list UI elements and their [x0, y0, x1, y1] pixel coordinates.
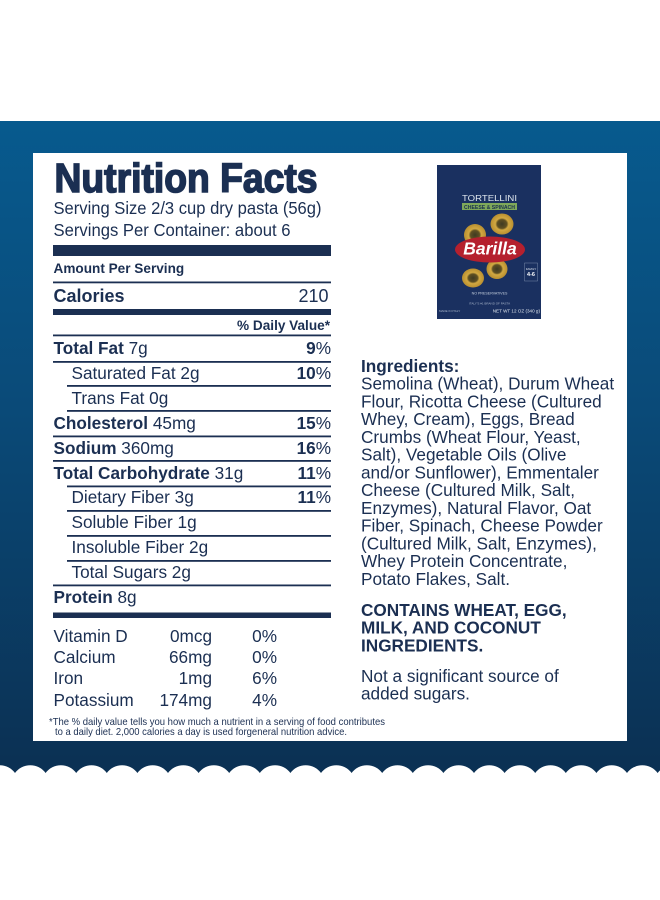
footnote: [49, 717, 385, 738]
ingredients block: Fiber, Spinach, Cheese Powder: [361, 516, 603, 536]
vitamins and minerals: [54, 626, 277, 710]
panel: white card: [33, 153, 627, 741]
nutrient rows: Soluble Fiber 1g: [72, 512, 197, 532]
package name: TORTELLINI: [462, 194, 517, 203]
added sugars note: Not a significant source of: [361, 666, 559, 686]
product package: [437, 165, 541, 319]
vitamins and minerals: 6%: [252, 668, 277, 688]
nutrient rows: Total Fat 7g: [54, 338, 148, 358]
vitamins and minerals: 0mcg: [170, 626, 212, 646]
vitamins and minerals: 4%: [252, 690, 277, 710]
nutrient rows: 11%: [298, 463, 331, 483]
vitamins and minerals: Vitamin D: [54, 626, 128, 646]
nutrient rows: 16%: [297, 438, 331, 458]
vitamins and minerals: Iron: [54, 668, 83, 688]
added sugars note: [361, 666, 559, 704]
blue background band with scalloped edge: [0, 121, 660, 773]
Barilla logo: Barilla: [463, 238, 517, 258]
allergen statement: INGREDIENTS.: [361, 636, 483, 656]
ingredients block: and/or Sunflower), Emmentaler: [361, 462, 599, 482]
nutrient rows: Trans Fat 0g: [72, 388, 168, 408]
ingredients block: [361, 356, 614, 589]
nutrient rows: 11%: [298, 487, 331, 507]
nutrient rows: Sodium 360mg: [54, 438, 174, 458]
ingredients block: Whey Protein Concentrate,: [361, 551, 567, 571]
nutrient rows: Dietary Fiber 3g: [72, 487, 194, 507]
nutrient rows: Saturated Fat 2g: [72, 363, 200, 383]
ingredients block: (Cultured Milk, Salt, Enzymes),: [361, 534, 597, 554]
vitamins and minerals: 174mg: [159, 690, 212, 710]
serving information: Serving Size 2/3 cup dry pasta (56g): [54, 198, 322, 218]
ingredients block: Salt), Vegetable Oils (Olive: [361, 445, 566, 465]
added sugars note: added sugars.: [361, 684, 470, 704]
flavor band: CHEESE & SPINACH: [464, 205, 515, 211]
package body: [437, 165, 541, 319]
footnote: *The % daily value tells you how much a nutrient in a serving of food contributes: [49, 717, 385, 728]
nutrient rows: [54, 338, 331, 607]
nutrient rows: 9%: [306, 338, 331, 358]
calories row: 210: [298, 286, 328, 306]
vitamins and minerals: 1mg: [179, 668, 212, 688]
ingredients block: Whey, Cream), Eggs, Bread: [361, 409, 575, 429]
ingredients block: Ingredients:: [361, 356, 459, 376]
nutrition table rules: [53, 245, 331, 618]
family size badge: 4-6: [527, 272, 535, 278]
family size badge: FAMILY: [526, 267, 536, 271]
ingredients block: Flour, Ricotta Cheese (Cultured: [361, 392, 602, 412]
serving information: [54, 198, 322, 240]
nutrient rows: 10%: [297, 363, 331, 383]
daily value header: % Daily Value*: [237, 318, 331, 333]
Barilla logo: [455, 236, 525, 262]
ingredients block: Cheese (Cultured Milk, Salt,: [361, 480, 575, 500]
vitamins and minerals: 0%: [252, 647, 277, 667]
nutrient rows: Protein 8g: [54, 587, 137, 607]
vitamins and minerals: Calcium: [54, 647, 116, 667]
allergen statement: MILK, AND COCONUT: [361, 618, 541, 638]
amount per serving label: Amount Per Serving: [54, 261, 184, 276]
calories row: [54, 286, 328, 306]
package small print: [439, 292, 540, 314]
package small print: NO PRESERVATIVES: [472, 292, 508, 296]
package small print: NET WT 12 OZ (340 g): [493, 308, 540, 314]
vitamins and minerals: 66mg: [169, 647, 212, 667]
title: Nutrition Facts: [54, 155, 318, 201]
ingredients block: Enzymes), Natural Flavor, Oat: [361, 498, 591, 518]
nutrient rows: 15%: [297, 413, 331, 433]
footnote: to a daily diet. 2,000 calories a day is used forgeneral nutrition advice.: [55, 727, 347, 738]
nutrient rows: Total Sugars 2g: [72, 562, 191, 582]
ingredients block: Potato Flakes, Salt.: [361, 569, 510, 589]
vitamins and minerals: Potassium: [54, 690, 134, 710]
allergen statement: [361, 600, 567, 656]
nutrient rows: Insoluble Fiber 2g: [72, 537, 208, 557]
nutrient rows: Total Carbohydrate 31g: [54, 463, 243, 483]
family size badge: [524, 263, 538, 281]
package small print: MADE IN ITALY: [439, 309, 460, 313]
ingredients block: Semolina (Wheat), Durum Wheat: [361, 374, 614, 394]
pasta pieces: [462, 214, 514, 288]
calories row: Calories: [54, 286, 125, 306]
vitamins and minerals: 0%: [252, 626, 277, 646]
package small print: ITALY'S #1 BRAND OF PASTA: [469, 302, 510, 306]
allergen statement: CONTAINS WHEAT, EGG,: [361, 600, 567, 620]
ingredients block: Crumbs (Wheat Flour, Yeast,: [361, 427, 581, 447]
serving information: Servings Per Container: about 6: [54, 220, 290, 240]
nutrient rows: Cholesterol 45mg: [54, 413, 196, 433]
